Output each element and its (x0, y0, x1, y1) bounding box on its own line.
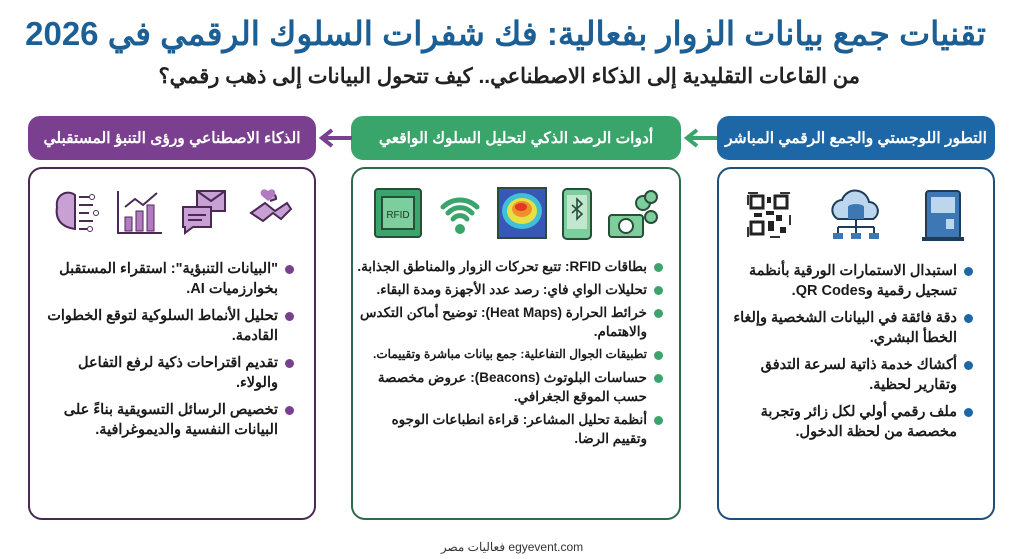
bullets: green: تحليلات الواي فاي: رصد عدد الأجهزة ومدة البقاء. (377, 282, 647, 297)
bullets: blue: دقة فائقة في البيانات الشخصية وإلغاء الخطأ البشري. (733, 310, 957, 346)
bullets: purple: تقديم اقتراحات ذكية لرفع التفاعل والولاء. (78, 355, 278, 391)
bullets: blue: ملف رقمي أولي لكل زائر وتجربة مخصصة من لحظة الدخول. (761, 404, 957, 440)
panel: green (351, 167, 681, 520)
bullets: purple: تخصيص الرسائل التسويقية بناءً على البيانات النفسية والديموغرافية. (64, 402, 278, 438)
header: purple: الذكاء الاصطناعي ورؤى التنبؤ المستقبلي (43, 130, 301, 146)
bullets: purple (47, 261, 294, 438)
title: تقنيات جمع بيانات الزوار بفعالية: فك شفرات السلوك الرقمي في 2026 (25, 15, 986, 52)
panel: blue (717, 167, 995, 520)
bullets: green: تطبيقات الجوال التفاعلية: جمع بيانات مباشرة وتقييمات. (373, 347, 647, 361)
arrow: green to purple (318, 128, 352, 148)
icons: purple (56, 189, 292, 235)
icons: green: RFID (386, 210, 410, 221)
bullets: green: حساسات البلوتوث (Beacons): عروض مخصصة حسب الموقع الجغرافي. (378, 370, 647, 404)
header: purple (28, 116, 316, 160)
header: blue (717, 116, 995, 160)
bullets: green: أنظمة تحليل المشاعر: قراءة انطباعات الوجوه وتقييم الرضا. (392, 412, 647, 446)
bullets: green: بطاقات RFID: تتبع تحركات الزوار والمناطق الجذابة. (357, 259, 647, 274)
header: blue: التطور اللوجستي والجمع الرقمي المباشر (725, 130, 987, 146)
header: green: أدوات الرصد الذكي لتحليل السلوك الواقعي (379, 130, 653, 146)
bullets: green: خرائط الحرارة (Heat Maps): توضيح أماكن التكدس والاهتمام. (360, 305, 647, 339)
footer: egyevent.com فعاليات مصر (441, 540, 583, 554)
bullets: purple: تحليل الأنماط السلوكية لتوقع الخطوات القادمة. (47, 308, 278, 344)
subtitle: من القاعات التقليدية إلى الذكاء الاصطناعي.. كيف تتحول البيانات إلى ذهب رقمي؟ (158, 65, 860, 88)
bullets: blue: استبدال الاستمارات الورقية بأنظمة تسجيل رقمية وQR Codes. (749, 263, 957, 299)
panel: purple (28, 167, 316, 520)
bullets: blue (733, 260, 973, 440)
bullets: blue: أكشاك خدمة ذاتية لسرعة التدفق وتقارير لحظية. (761, 357, 957, 393)
icons: blue (747, 190, 964, 241)
bullets: purple: "البيانات التنبؤية": استقراء المستقبل بخوارزميات AI. (59, 261, 278, 297)
bullets: green (357, 259, 663, 447)
header: green (351, 116, 681, 160)
arrow: blue to green (684, 128, 717, 148)
icons: green (374, 187, 658, 240)
